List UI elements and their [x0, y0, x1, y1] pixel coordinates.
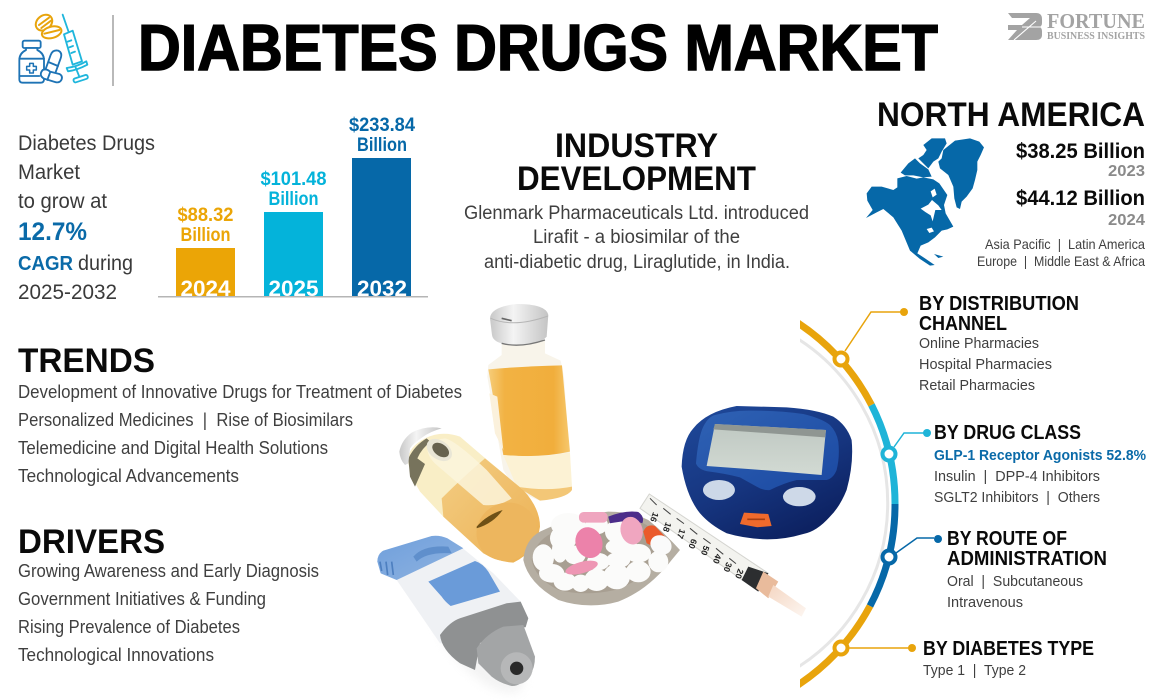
syringe: 50	[699, 544, 711, 557]
market growth statement: 2025-2032	[18, 281, 117, 304]
north america values: $38.25 Billion	[1016, 140, 1145, 163]
segment: diabetes type: BY DIABETES TYPE	[923, 638, 1094, 660]
bar 2024: 2024	[180, 276, 231, 301]
bar 2024: Billion	[180, 225, 230, 246]
segment: drug class: Insulin | DPP-4 Inhibitors	[934, 468, 1100, 485]
north america heading: NORTH AMERICA	[877, 96, 1145, 134]
segment: distribution channel: Hospital Pharmacies	[919, 356, 1052, 373]
market growth statement	[18, 132, 155, 304]
tilted vial	[399, 427, 548, 572]
segment: distribution channel: Retail Pharmacies	[919, 377, 1035, 394]
industry development: DEVELOPMENT	[517, 160, 756, 198]
segment: route of administration: Intravenous	[947, 594, 1023, 611]
syringe: 16	[648, 511, 661, 524]
industry development: anti-diabetic drug, Liraglutide, in India.	[484, 252, 790, 273]
syringe: 60	[686, 538, 699, 550]
title: DIABETES DRUGS MARKET	[138, 11, 938, 84]
syringe	[640, 494, 806, 617]
segment: distribution channel: BY DISTRIBUTION	[919, 293, 1079, 315]
industry development: INDUSTRY	[555, 127, 718, 165]
drivers: Growing Awareness and Early Diagnosis	[18, 561, 319, 581]
trends: Development of Innovative Drugs for Treatment of Diabetes	[18, 382, 462, 402]
syringe: 40	[711, 553, 723, 565]
segment: route of administration: BY ROUTE OF	[947, 528, 1067, 550]
segment: diabetes type	[834, 638, 1094, 679]
segment: route of administration	[882, 528, 1107, 611]
segment: route of administration: Oral | Subcutaneous	[947, 573, 1083, 590]
bar 2025: $101.48	[260, 169, 326, 190]
logo: Fortune Business Insights: BUSINESS INSIGHTS	[1047, 30, 1145, 42]
syringe: 17	[675, 528, 687, 540]
north america values: 2023	[1108, 163, 1145, 180]
logo: Fortune Business Insights: FORTUNE	[1047, 9, 1145, 33]
segment: drug class	[882, 422, 1146, 506]
upright vial	[487, 304, 572, 501]
trends	[18, 342, 462, 486]
syringe: 30	[721, 561, 734, 574]
industry development: Glenmark Pharmaceuticals Ltd. introduced	[464, 203, 809, 224]
syringe: 20	[733, 568, 746, 580]
map: North America	[866, 138, 984, 266]
industry development	[464, 127, 809, 273]
trends: TRENDS	[18, 342, 155, 380]
market growth statement: to grow at	[18, 190, 107, 213]
segment: drug class: BY DRUG CLASS	[934, 422, 1081, 444]
bar 2025: 2025	[268, 276, 318, 301]
bar 2032	[349, 115, 415, 301]
icon: medicine bottle, pills and syringe	[19, 12, 88, 83]
market growth statement: Market	[18, 161, 80, 184]
bar 2032: 2032	[357, 276, 407, 301]
segment: distribution channel: Online Pharmacies	[919, 335, 1039, 352]
glucose meter	[682, 406, 852, 539]
logo: Fortune Business Insights	[1008, 9, 1145, 42]
bar 2024	[176, 205, 235, 301]
pill bowl	[523, 512, 680, 605]
segment: drug class: GLP-1 Receptor Agonists 52.8%	[934, 447, 1146, 464]
bar 2024: $88.32	[178, 205, 234, 226]
trends: Personalized Medicines | Rise of Biosimilars	[18, 410, 353, 430]
market growth statement: Diabetes Drugs	[18, 132, 155, 155]
north america values	[977, 140, 1145, 269]
north america values: Asia Pacific | Latin America	[985, 236, 1145, 252]
syringe: 18	[661, 521, 673, 534]
bar 2025: Billion	[268, 189, 318, 210]
trends: Telemedicine and Digital Health Solutions	[18, 438, 328, 458]
drivers: DRIVERS	[18, 523, 165, 561]
photo: diabetes supplies	[377, 304, 852, 700]
segment: diabetes type: Type 1 | Type 2	[923, 662, 1026, 679]
segment: route of administration: ADMINISTRATION	[947, 548, 1107, 570]
drivers: Technological Innovations	[18, 645, 214, 665]
drivers: Rising Prevalence of Diabetes	[18, 617, 240, 637]
segment: drug class: SGLT2 Inhibitors | Others	[934, 489, 1100, 506]
segment: distribution channel	[834, 293, 1079, 394]
divider	[112, 15, 114, 86]
north america values: 2024	[1108, 212, 1145, 229]
market growth statement: 12.7%	[18, 218, 87, 246]
insulin pen	[377, 536, 537, 700]
bar chart: market size	[158, 115, 428, 301]
trends: Technological Advancements	[18, 466, 239, 486]
industry development: Lirafit - a biosimilar of the	[533, 227, 740, 248]
segment: distribution channel: CHANNEL	[919, 313, 1007, 335]
bar 2032: $233.84	[349, 115, 415, 136]
drivers	[18, 523, 319, 665]
drivers: Government Initiatives & Funding	[18, 589, 266, 609]
bar 2025	[260, 169, 326, 301]
north america values: $44.12 Billion	[1016, 187, 1145, 210]
market growth statement: during	[78, 252, 133, 275]
bar 2032: Billion	[357, 135, 407, 156]
market growth statement: CAGR	[18, 253, 74, 275]
segmentation arc	[790, 318, 895, 690]
